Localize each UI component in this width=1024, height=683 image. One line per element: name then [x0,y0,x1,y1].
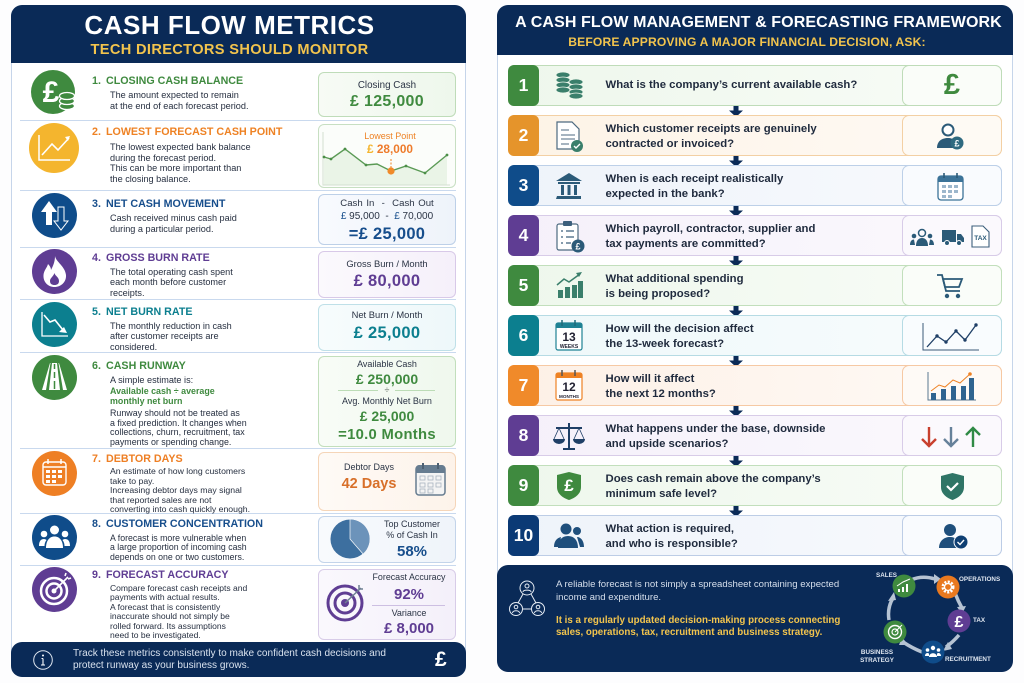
step 10 [508,515,1002,556]
heading: 3. [92,198,101,210]
highlighted message: sales, operations, tax, recruitment and business strategy. [556,627,822,638]
step 2 [508,115,1002,156]
description: the closing balance. [110,174,191,184]
description: converting into cash quickly enough. [110,504,250,514]
step 5 [508,265,1002,306]
icon: up and down arrows [32,193,77,238]
icon: pound: £ [944,69,960,101]
metric 1: closing cash balance [20,66,456,121]
step number: 9 [519,475,528,495]
metric 6: cash runway [20,353,456,449]
card value: £ 125,000 [350,93,424,110]
step number [508,415,539,456]
metric 8: customer concentration [20,514,456,566]
footer text [73,648,386,671]
step number: 6 [519,325,528,345]
chart card [318,124,456,188]
description: inaccurate should not simply be [110,611,230,621]
label: available cash: Available Cash [357,359,417,369]
metric 3: net cash movement [20,191,456,248]
step number [508,315,539,356]
icon cell [902,65,1002,106]
step 4 [508,215,1002,256]
heading: NET BURN RATE [106,306,192,318]
description [110,90,248,111]
metric 4: gross burn rate [20,248,456,300]
highlighted message [556,614,840,640]
icon: bars with trend [927,371,977,403]
description: receipts. [110,288,144,298]
description: each month before customer [110,277,226,287]
card value: 42 Days [342,476,396,492]
step number: 3 [519,175,528,195]
arrow [729,256,743,267]
question [606,222,815,252]
icon: connected people [509,579,545,617]
card label: Top Customer [384,519,440,529]
question: Does cash remain above the company’s [606,472,821,484]
description: need to be investigated. [110,630,201,640]
step 8 [508,415,1002,456]
calculation card [318,356,456,447]
icon: scenario arrows [920,426,982,448]
description: during a particular period. [110,224,213,234]
description: A simple estimate is: [110,375,193,385]
question: contracted or invoiced? [606,138,734,150]
icon cell [902,165,1002,206]
cycle labels: OPERATIONS [958,576,1000,583]
chart value: £ 28,000 [367,142,413,156]
question: and who is responsible? [606,538,738,550]
arrow [729,156,743,167]
metric 9: forecast accuracy [32,567,456,640]
icon: pound and coins: £ [43,76,60,109]
question: How will the decision affect [606,322,754,334]
description: The amount expected to remain [110,90,239,100]
card label: Gross Burn / Month [346,258,428,269]
metric 2: lowest forecast cash point [20,121,456,191]
icon cell [902,465,1002,506]
description [110,320,232,352]
node: sales [892,574,915,598]
icon: 12 months calendar: MONTHS [559,394,579,399]
step number [508,365,539,406]
description: Compare forecast cash receipts and [110,582,247,592]
icon: person with pound: £ [954,138,960,148]
icon: calendar [937,173,965,201]
result: =£ 25,000 [349,225,425,243]
question [606,172,783,202]
heading: CLOSING CASH BALANCE [106,75,243,87]
card label: Debtor Days [344,462,394,472]
icon: checklist with pound [555,220,585,253]
label: accuracy: Forecast Accuracy [372,572,446,582]
description: Available cash ÷ average [110,386,215,396]
chart label: Lowest Point [364,131,416,141]
question: When is each receipt realistically [606,172,783,184]
step 9 [508,465,1002,506]
line chart [322,132,450,186]
description: at the end of each forecast period. [110,101,248,111]
card value: £ 80,000 [354,272,420,290]
label: monthly net burn: Avg. Monthly Net Burn [342,396,432,406]
step 6 [508,315,1002,356]
cycle labels: STRATEGY [860,657,894,664]
icon: truck [941,229,965,247]
question [606,322,754,352]
highlighted message: It is a regularly updated decision-making process connecting [556,614,840,626]
cycle diagram [850,566,1012,672]
card label: % of Cash In [386,530,438,540]
arrow [729,206,743,217]
column labels: Cash In - Cash Out [340,198,434,209]
cycle labels: BUSINESS [860,649,893,656]
description: depends on one or two customers. [110,552,244,562]
message text: income and expenditure. [556,592,661,603]
icon: flame [32,249,77,294]
node: operations [936,576,959,598]
cycle labels: RECRUITMENT [944,656,990,663]
question: What is the company’s current available cash? [606,79,857,91]
caveat: Runway should not be treated as [110,408,240,418]
step number [508,265,539,306]
node: tax [947,610,970,632]
step number: 8 [519,425,528,445]
question: tax payments are committed? [606,238,766,250]
subtraction: £ 95,000 - £ 70,000 [341,211,433,222]
description: during the forecast period. [110,153,216,163]
icon: calendar [32,451,77,496]
footer text: protect runway as your business grows. [73,660,249,671]
step 7 [508,365,1002,406]
question: Which payroll, contractor, supplier and [606,222,815,234]
heading: GROSS BURN RATE [106,252,210,264]
question [606,422,825,452]
icon: document with tick [555,121,585,153]
footer text: Track these metrics consistently to make confident cash decisions and [73,648,386,659]
question: the next 12 months? [606,388,716,400]
label: variance: Variance [392,608,426,618]
value card [318,452,456,511]
icon: target [326,584,364,622]
description: A forecast is more vulnerable when [110,532,246,542]
question [606,372,716,402]
question: minimum safe level? [606,488,717,500]
footer note [11,642,466,677]
icon: bank [555,172,583,200]
value card [318,304,456,351]
description [110,375,215,406]
header: framework [497,5,1013,55]
title: CASH FLOW METRICS [84,10,375,40]
icon cell [902,265,1002,306]
description [110,266,233,298]
value: monthly net burn: £ 25,000 [360,408,414,424]
closing message panel [497,565,1013,672]
description: rolled forward. Its assumptions [110,620,226,630]
icon: people [910,228,934,247]
step number: 2 [519,125,528,145]
heading: 2. [92,126,101,138]
card label [384,519,440,540]
heading: 6. [92,360,101,372]
icon: grey calendar [415,463,446,496]
icon: person with pound [936,123,966,151]
icon: 13 weeks calendar: WEEKS [560,344,579,350]
caveat [110,408,247,447]
question: What additional spending [606,272,744,284]
title: A CASH FLOW MANAGEMENT & FORECASTING FRAMEWORK [515,14,1002,31]
description [110,532,247,562]
card value: £ 25,000 [354,324,420,342]
question [606,522,738,552]
icon: falling chart [32,302,77,347]
caveat: payments or spending change. [110,436,231,446]
step number [508,515,539,556]
cycle labels: SALES [876,572,896,579]
description [110,142,251,184]
icon: tax document [971,225,990,248]
icon: tax document: TAX [974,235,987,242]
value card [318,251,456,298]
heading: LOWEST FORECAST CASH POINT [106,126,282,138]
icon: person with tick [938,522,970,550]
icon: pound and coins [31,70,75,114]
icon cell [902,215,1002,256]
step number [508,465,539,506]
icon cell [902,515,1002,556]
value card [318,72,456,117]
icon: rising chart [29,123,79,173]
icon: growth bars [556,272,584,300]
icon: checklist with pound: £ [575,242,581,252]
description: Cash received minus cash paid [110,213,237,223]
description: that reported sales are not [110,494,211,504]
heading: DEBTOR DAYS [106,453,183,465]
card value: 58% [397,543,427,560]
icon: shopping cart [936,273,964,300]
question [606,122,817,152]
arrow [729,306,743,317]
metric 5: net burn rate [20,300,456,353]
description: The total operating cash spent [110,266,233,276]
question: the 13-week forecast? [606,338,724,350]
description [110,466,250,514]
description: take to pay. [110,476,154,486]
heading: 7. [92,453,101,465]
step 1 [508,65,1002,106]
heading: 1. [92,75,101,87]
icon: 12 months calendar: 12 [562,380,576,394]
question: What happens under the base, downside [606,422,825,434]
question: expected in the bank? [606,188,725,200]
result: =10.0 Months [338,427,436,443]
icon cell [902,115,1002,156]
heading: NET CASH MOVEMENT [106,198,225,210]
value card [318,194,456,245]
heading: 9. [92,569,101,581]
cycle labels [860,572,1000,664]
question: is being proposed? [606,288,710,300]
question: How will it affect [606,372,694,384]
card label: Net Burn / Month [352,309,422,320]
arrow [729,506,743,517]
step number [508,65,539,106]
description: This can be more important than [110,163,241,173]
description: A forecast that is consistently [110,602,220,612]
subtitle: BEFORE APPROVING A MAJOR FINANCIAL DECISION, ASK: [568,35,926,49]
icon: target [32,567,77,612]
icon: shield with pound [556,471,582,501]
icon cell [902,415,1002,456]
description: a large proportion of incoming cash [110,542,247,552]
question [606,472,821,502]
icon: line chart [922,322,982,352]
step number [508,115,539,156]
panel: forecasting framework [497,5,1013,672]
description: Increasing debtor days may signal [110,485,242,495]
icon: 13 weeks calendar [555,320,583,352]
icon: coin stacks [556,72,583,99]
question: and upside scenarios? [606,438,728,450]
icon: pound: £ [435,648,447,671]
heading: 4. [92,252,101,264]
description: payments with actual results. [110,592,220,602]
value: variance: £ 8,000 [384,620,434,636]
panel: cash flow metrics [11,5,466,677]
icon cell [902,315,1002,356]
heading: 8. [92,518,101,530]
question: Which customer receipts are genuinely [606,122,817,134]
icon: road [32,355,77,400]
heading: CUSTOMER CONCENTRATION [106,518,263,530]
description: monthly net burn [110,396,182,406]
caveat: a fixed prediction. It changes when [110,418,247,428]
divide sign: ÷ [385,385,389,395]
pie chart [330,520,370,558]
node: tax: £ [954,614,963,631]
node: recruitment [921,640,944,664]
icon cell [902,365,1002,406]
description: An estimate of how long customers [110,466,245,476]
header: cash flow metrics [11,5,466,63]
arrow [729,356,743,367]
arrow [729,406,743,417]
icon: group of people [32,515,77,560]
step number [508,165,539,206]
step number [508,215,539,256]
description [110,582,247,640]
description: after customer receipts are [110,331,219,341]
heading: 5. [92,306,101,318]
value card [318,516,456,563]
message text [556,578,839,604]
heading: CASH RUNWAY [106,360,186,372]
step number: 4 [519,225,528,245]
step 3 [508,165,1002,206]
description: considered. [110,342,157,352]
description: The lowest expected bank balance [110,142,251,152]
value: available cash: £ 250,000 [356,371,418,387]
value: accuracy: 92% [394,586,424,603]
step number: 5 [519,275,528,295]
step number: 7 [519,375,528,395]
cycle labels: TAX [972,617,985,624]
heading: FORECAST ACCURACY [106,569,229,581]
icon: 13 weeks calendar: 13 [562,330,576,344]
card label: Closing Cash [358,80,416,91]
step number: 10 [514,525,533,545]
arrow [729,106,743,115]
description [110,213,237,234]
value card [318,569,456,640]
description: The monthly reduction in cash [110,320,232,330]
icon: team [554,523,584,549]
node: business strategy [883,620,906,644]
question [606,272,744,302]
icon: shield with pound: £ [564,476,574,495]
subtitle: TECH DIRECTORS SHOULD MONITOR [90,42,368,58]
message text: A reliable forecast is not simply a spreadsheet containing expected [556,579,839,590]
caveat: collections, churn, recruitment, tax [110,427,245,437]
metric 7: debtor days [20,449,456,514]
icon: info [33,650,53,670]
arrow [729,456,743,467]
icon: 12 months calendar [555,370,583,402]
icon: shield with tick [940,472,964,500]
icon: scales [553,422,585,451]
question: What action is required, [606,522,734,534]
step number: 1 [519,75,528,95]
